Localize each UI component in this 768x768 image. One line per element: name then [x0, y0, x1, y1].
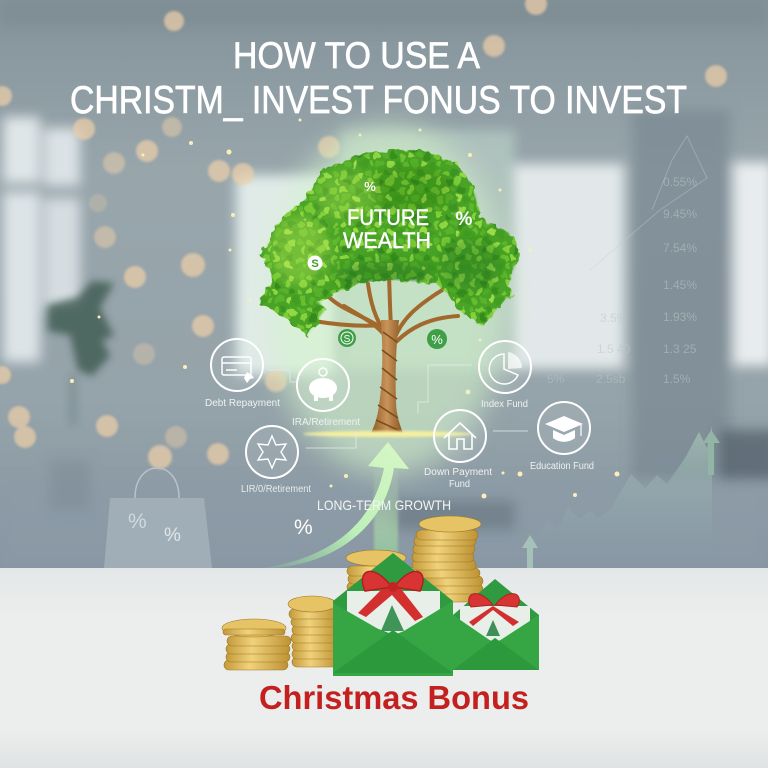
title	[70, 35, 687, 122]
growth arrow	[264, 442, 409, 568]
percent and dollar badges in crown: S	[311, 258, 319, 270]
badge: dollar	[338, 329, 356, 347]
crown backing	[262, 151, 518, 333]
tree	[260, 148, 520, 433]
label: long-term growth: LONG-TERM GROWTH	[317, 497, 451, 513]
data panel: faded financial chart: 1.5 40	[597, 342, 631, 356]
data panel: faded financial chart: 1.3 25	[663, 342, 697, 356]
coin stack: second	[288, 596, 338, 667]
growth chart: faded mountains with arrow	[510, 426, 720, 568]
background plant	[48, 281, 114, 425]
shopping bag	[104, 468, 212, 568]
icon: index fund pie	[479, 341, 531, 410]
icon: down payment house: Fund	[449, 479, 470, 490]
green beam	[374, 470, 398, 570]
data panel: faded financial chart: 3.5%	[600, 311, 628, 325]
percent and dollar badges in crown: %	[456, 209, 473, 230]
ground glow line	[303, 431, 473, 437]
data panel: faded financial chart: 7.54%	[663, 241, 697, 255]
data panel: faded financial chart: 9.45%	[663, 207, 697, 221]
coin stack: tall right	[412, 516, 483, 602]
data panel: faded financial chart	[547, 136, 707, 386]
label: christmas bonus: Christmas Bonus	[259, 679, 529, 716]
icon connectors	[268, 365, 528, 448]
data panel: faded financial chart: 1.93%	[663, 310, 697, 324]
data panel: faded financial chart: 1.45%	[663, 278, 697, 292]
data panel: faded financial chart: 5%	[547, 372, 565, 386]
tree label: future wealth	[343, 205, 431, 253]
icon: debt repayment: Debt Repayment	[205, 398, 280, 409]
icon: IRA/Roth retirement star: LIR/0/Retirement	[241, 484, 311, 495]
icon: education graduation cap	[530, 402, 594, 472]
tree crown	[260, 148, 520, 337]
background: blurred office	[0, 0, 768, 570]
tree label: future wealth: FUTURE	[347, 205, 429, 230]
coin stack: far left	[222, 619, 291, 670]
title: HOW TO USE A	[233, 35, 480, 76]
crown shading	[270, 165, 500, 291]
coin stack: middle back	[346, 550, 406, 592]
icon: debt repayment	[205, 339, 280, 409]
icon: index fund pie: Index Fund	[481, 399, 528, 410]
tree trunk and branches	[308, 272, 462, 433]
icon: IRA retirement piggy bank: IRA/Retirement	[292, 417, 360, 428]
icon: education graduation cap: Education Fund	[530, 461, 594, 472]
shopping bag: %	[128, 510, 147, 533]
badge: percent	[427, 329, 447, 349]
envelope: small right	[453, 579, 539, 670]
data panel: faded financial chart: 0.55%	[663, 175, 697, 189]
icon: IRA retirement piggy bank	[292, 359, 360, 428]
shopping bag: %	[164, 525, 181, 546]
badge: percent: %	[431, 332, 443, 347]
title: CHRISTM_ INVEST FONUS TO INVEST	[70, 79, 687, 122]
icon: down payment house: Down Payment	[424, 467, 492, 478]
icon: down payment house	[424, 410, 492, 490]
bokeh lights	[0, 0, 727, 469]
data panel: faded financial chart: 1.5%	[663, 372, 691, 386]
sparkles	[70, 118, 620, 498]
icon: IRA/Roth retirement star	[241, 426, 311, 495]
percent and dollar badges in crown: %	[364, 179, 376, 194]
percent and dollar badges in crown	[308, 179, 473, 270]
percent symbol: %	[294, 516, 313, 539]
glow behind tree	[268, 125, 508, 475]
envelope: large left	[333, 553, 453, 676]
table surface	[0, 568, 768, 768]
data panel: faded financial chart: 2.5sb	[596, 372, 626, 386]
badge: dollar: S	[344, 334, 351, 345]
tree label: future wealth: WEALTH	[343, 228, 431, 253]
